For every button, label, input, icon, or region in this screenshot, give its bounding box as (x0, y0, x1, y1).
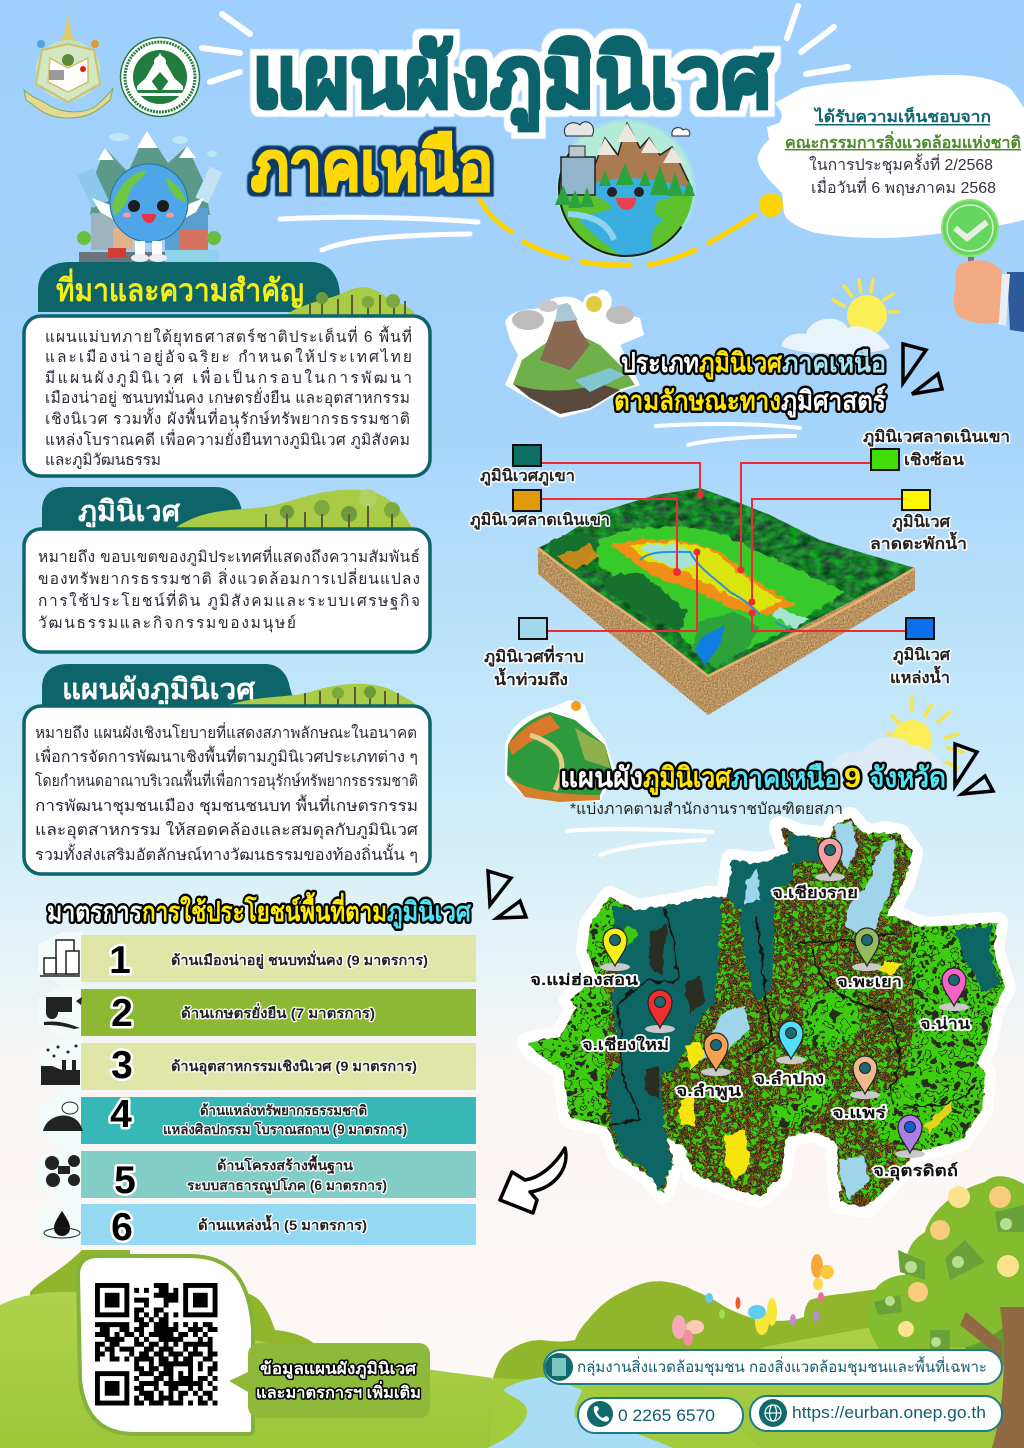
legend: river terrace (870, 490, 967, 553)
brush strokes (567, 424, 800, 855)
section: origin and importance (24, 262, 430, 476)
body text: การใช้ประโยชน์ที่ดิน ภูมิสังคมและระบบเศรษฐกิจ (38, 590, 420, 611)
icon: factory (41, 1044, 80, 1085)
pin: Phayao (837, 928, 902, 991)
pin: Mae Hong Son: จ.แม่ฮ่องสอน (530, 972, 638, 989)
note text: *แบ่งภาคตามสำนักงานราชบัณฑิตยสภา (570, 801, 843, 818)
side faces (538, 548, 708, 715)
icon: infrastructure (45, 1155, 80, 1187)
legend: complex slope: ภูมินิเวศลาดเนินเขา (863, 428, 1010, 448)
legend: hill slope: ภูมินิเวศลาดเนินเขา (470, 511, 610, 531)
illustration: earth with mountains (555, 118, 697, 259)
body text: มีแผนผังภูมินิเวศ เพื่อเป็นกรอบในการพัฒนา (45, 367, 412, 388)
heading: 9 provinces: จังหวัด (869, 762, 946, 793)
icon: water drop (44, 1211, 80, 1238)
measure 1: 1 (109, 939, 131, 982)
clouds (109, 133, 129, 141)
approval text: เมื่อวันที่ 6 พฤษภาคม 2568 (811, 177, 996, 197)
pin: Chiang Rai (772, 838, 858, 902)
trunk (960, 1307, 1024, 1448)
heading: land use measures (47, 891, 472, 929)
illustration: landscape map island (505, 700, 615, 802)
pin: Nan: จ.น่าน (920, 1016, 970, 1033)
heading: landscape types: ภูมินิเวศ (699, 348, 783, 380)
pin: Lamphun (676, 1033, 741, 1102)
measure 6: 6 (111, 1206, 133, 1249)
heading: 9 provinces: ภาคเหนือ (731, 762, 840, 793)
legend: mountain: ภูมินิเวศภูเขา (480, 467, 575, 487)
legend: complex slope (863, 428, 1010, 470)
body box (24, 316, 430, 476)
QR callout: ข้อมูลแผนผังภูมินิเวศ (260, 1360, 417, 1380)
ground (555, 178, 697, 258)
decorative triangles: measures heading (488, 871, 526, 918)
section: ecological landscape definition: ภูมินิเวศ (78, 496, 181, 529)
road and water (79, 252, 219, 263)
legend: water (890, 618, 951, 687)
heading: 9 provinces: 9 (844, 762, 861, 793)
trees (228, 684, 416, 705)
pin: Chiang Mai (582, 990, 675, 1054)
title: แผนผังภูมินิเวศ (252, 30, 773, 131)
heading: 9 provinces: แผนผัง (560, 762, 643, 793)
heading: land use measures: มาตรการ (47, 897, 142, 927)
approval text: คณะกรรมการสิ่งแวดล้อมแห่งชาติ (785, 131, 1021, 152)
legs (135, 241, 145, 257)
icon: sun and cloud lower (830, 697, 963, 777)
measure 3: ด้านอุตสาหกรรมเชิงนิเวศ (9 มาตรการ) (171, 1058, 417, 1075)
mountains (90, 131, 210, 215)
heading: landscape types (614, 348, 886, 418)
map light blue and yellow patches (680, 822, 952, 1200)
header rays (202, 6, 848, 250)
measure 5 (38, 1148, 476, 1202)
butterflies (672, 1254, 834, 1346)
contact: phone (578, 1398, 743, 1433)
yellow dot (759, 193, 783, 217)
decorative triangles: landscape types (903, 344, 942, 394)
pin: Nan (920, 968, 970, 1033)
pin: Chiang Mai: จ.เชียงใหม่ (582, 1035, 669, 1054)
tower (561, 157, 595, 195)
terrain top (538, 488, 915, 676)
measure 6 (38, 1202, 476, 1249)
measure 3: 3 (111, 1044, 133, 1087)
heading: landscape types: ตามลักษณะทาง (614, 386, 781, 416)
pin: Phrae: จ.แพร่ (832, 1105, 887, 1122)
body box (24, 706, 430, 874)
body text: โดยกำหนดอาณาบริเวณพื้นที่เพื่อการอนุรักษ์ทรัพยากรธรรมชาติ (35, 769, 418, 791)
heading: 9 provinces (560, 762, 946, 795)
legend: floodplain (484, 618, 584, 689)
pin: Mae Hong Son (530, 928, 638, 989)
pin: Lamphun: จ.ลำพูน (676, 1082, 741, 1102)
trees (555, 163, 695, 208)
illustration: floating island (505, 290, 644, 418)
measures list (38, 932, 476, 1249)
measure 2: 2 (111, 992, 133, 1035)
heading: landscape types: ภาคเหนือ (782, 348, 886, 378)
land zones (548, 526, 845, 668)
body text: ของทรัพยากรธรรมชาติ สิ่งแวดล้อมการเปลี่ยนแปลง (38, 568, 420, 588)
QR callout (229, 1343, 430, 1418)
body text: เมืองน่าอยู่ ชนบทมั่นคง เกษตรยั่งยืน และอุตสาหกรรม (45, 387, 410, 408)
measure 4: แหล่งศิลปกรรม โบราณสถาน (9 มาตรการ) (163, 1120, 407, 1137)
logo: emblem (24, 14, 113, 118)
approval text (785, 105, 1021, 197)
section: ecological landscape plan definition (24, 664, 430, 874)
decorative triangles: provinces (955, 744, 993, 794)
approval text: ได้รับความเห็นชอบจาก (813, 105, 991, 126)
body text: เชิงนิเวศ รวมทั้ง ผังพื้นที่อนุรักษ์ทรัพยากรธรรมชาติ (45, 407, 410, 429)
pin: Lampang: จ.ลำปาง (754, 1070, 824, 1088)
legend: mountain (480, 445, 575, 487)
measure 2: ด้านเกษตรยั่งยืน (7 มาตรการ) (181, 1003, 375, 1021)
arms (92, 198, 204, 222)
measure 3 (38, 1040, 476, 1093)
legend: floodplain: น้ำท่วมถึง (494, 667, 568, 689)
body text: หมายถึง แผนผังเชิงนโยบายที่แสดงสภาพลักษณะในอนาคต (35, 722, 417, 742)
QR code (95, 1285, 218, 1403)
body text: และภูมิวัฒนธรรม (45, 452, 161, 470)
heading tab (42, 664, 296, 707)
pin: Lampang (754, 1021, 824, 1088)
heading: land use measures: ภูมินิเวศ (387, 897, 472, 929)
heading tab (42, 487, 250, 530)
body text (35, 722, 418, 864)
map mottled patches in mountains (620, 925, 705, 1100)
pin: Uttaradit (873, 1115, 958, 1181)
icon: sun and cloud top (781, 280, 898, 354)
map teal mountain areas (607, 832, 1000, 1190)
heading: landscape types: ประเภท (621, 348, 699, 378)
legend: river terrace: ภูมินิเวศ (892, 513, 951, 533)
globe (110, 164, 188, 242)
measure 5: 5 (114, 1159, 136, 1202)
trees (175, 489, 412, 528)
body text: การพัฒนาชุมชนเมือง ชุมชนชนบท พื้นที่เกษตรกรรม (35, 794, 418, 816)
logo: round department seal (120, 38, 200, 116)
measure 4: 4 (110, 1093, 132, 1136)
approval text: ในการประชุมครั้งที่ 2/2568 (809, 153, 993, 175)
arrow to measures (500, 1148, 566, 1213)
pin: Phrae (832, 1056, 887, 1122)
body text (38, 546, 420, 633)
money leaves (874, 1186, 1024, 1350)
section: ecological landscape definition (24, 487, 430, 652)
mascot: earth with city (77, 131, 223, 263)
measure 1: ด้านเมืองน่าอยู่ ชนบทมั่นคง (9 มาตรการ) (171, 950, 428, 969)
map halo (528, 818, 1005, 1207)
contact: phone: 0 2265 6570 (618, 1406, 715, 1425)
section: origin and importance: ที่มาและความสำคัญ (56, 268, 304, 309)
contact: website: https://eurban.onep.go.th (792, 1403, 986, 1422)
legend: water: ภูมินิเวศ (893, 646, 951, 666)
rim (538, 548, 915, 676)
legend: hill slope (470, 490, 610, 531)
body text: หมายถึง ขอบเขตของภูมิประเทศที่แสดงถึงความสัมพันธ์ (38, 546, 420, 567)
measure 4: ด้านแหล่งทรัพยากรธรรมชาติ (200, 1103, 367, 1118)
QR callout: และมาตรการฯ เพิ่มเติม (256, 1381, 421, 1402)
heading: land use measures: การใช้ประโยชน์พื้นที่ตาม (142, 891, 387, 927)
body text: รวมทั้งส่งเสริมอัตลักษณ์ทางวัฒนธรรมของท้องถิ่นนั้น ๆ (35, 843, 418, 864)
icon: city (40, 940, 80, 976)
towers (77, 168, 109, 208)
body box (24, 529, 430, 652)
heading tab (38, 262, 340, 312)
3D terrain block (538, 488, 915, 715)
body text (45, 325, 412, 470)
map land use mosaic (528, 818, 1005, 1207)
trees (285, 287, 416, 315)
icon: hand with check sign (942, 200, 1024, 332)
bottom landscape: hills and river (0, 1250, 1024, 1448)
approval cloud (758, 75, 1024, 238)
measure 5: ระบบสาธารณูปโภค (6 มาตรการ) (187, 1176, 387, 1194)
city (91, 213, 121, 250)
dashed yellow arc (480, 200, 755, 265)
tree (867, 1176, 1024, 1448)
body text: และอุตสาหกรรม ให้สอดคล้องและสมดุลกับภูมินิเวศ (35, 821, 418, 840)
contact: website (750, 1396, 1002, 1431)
measure 6: ด้านแหล่งน้ำ (5 มาตรการ) (198, 1214, 367, 1233)
pin: Chiang Rai: จ.เชียงราย (772, 884, 858, 902)
legend: floodplain: ภูมินิเวศที่ราบ (484, 645, 584, 668)
map green areas (528, 897, 1005, 1150)
pin: Phayao: จ.พะเยา (837, 974, 902, 991)
section: ecological landscape plan definition: แผนผังภูมินิเวศ (62, 674, 256, 707)
legend: water: แหล่งน้ำ (890, 665, 950, 687)
map pins (530, 838, 970, 1181)
face (607, 187, 617, 197)
body text: เพื่อการจัดการพัฒนาเชิงพื้นที่ตามภูมินิเวศประเภทต่าง ๆ (35, 745, 418, 767)
canopy back (960, 1300, 1024, 1370)
river (487, 1377, 673, 1448)
measure 2 (38, 986, 476, 1039)
subtitle: ภาคเหนือ (251, 129, 493, 205)
legend: river terrace: ลาดตะพักน้ำ (870, 531, 967, 553)
QR card (78, 1256, 253, 1434)
river (640, 552, 790, 630)
icon: tractor (44, 997, 82, 1029)
measure 1 (38, 932, 476, 985)
map of northern Thailand (528, 818, 1005, 1207)
body text: วัฒนธรรมและกิจกรรมของมนุษย์ (38, 614, 296, 633)
contact: department (544, 1350, 1002, 1384)
icon: natural resources (43, 1102, 83, 1131)
pin: Uttaradit: จ.อุตรดิตถ์ (873, 1162, 958, 1181)
heading: 9 provinces: ภูมินิเวศ (643, 762, 732, 795)
contact: department: กลุ่มงานสิ่งแวดล้อมชุมชน กองสิ่งแวดล้อมชุมชนและพื้นที่เฉพาะ (577, 1356, 987, 1377)
heading: landscape types: ภูมิศาสตร์ (781, 385, 886, 418)
body text: แหล่งโบราณคดี เพื่อความยั่งยืนทางภูมินิเวศ ภูมิสังคม (45, 429, 410, 450)
body text: และเมืองน่าอยู่อัจฉริยะ กำหนดให้ประเทศไทย (45, 348, 412, 367)
measure 4 (38, 1093, 476, 1147)
province boundaries (610, 908, 975, 1125)
canopy (867, 1176, 1024, 1350)
measure 5: ด้านโครงสร้างพื้นฐาน (217, 1155, 354, 1175)
legend: complex slope: เชิงซ้อน (904, 451, 964, 469)
connector lines (541, 463, 905, 631)
body text: แผนแม่บทภายใต้ยุทธศาสตร์ชาติประเด็นที่ 6 พื้นที่ (45, 325, 412, 347)
